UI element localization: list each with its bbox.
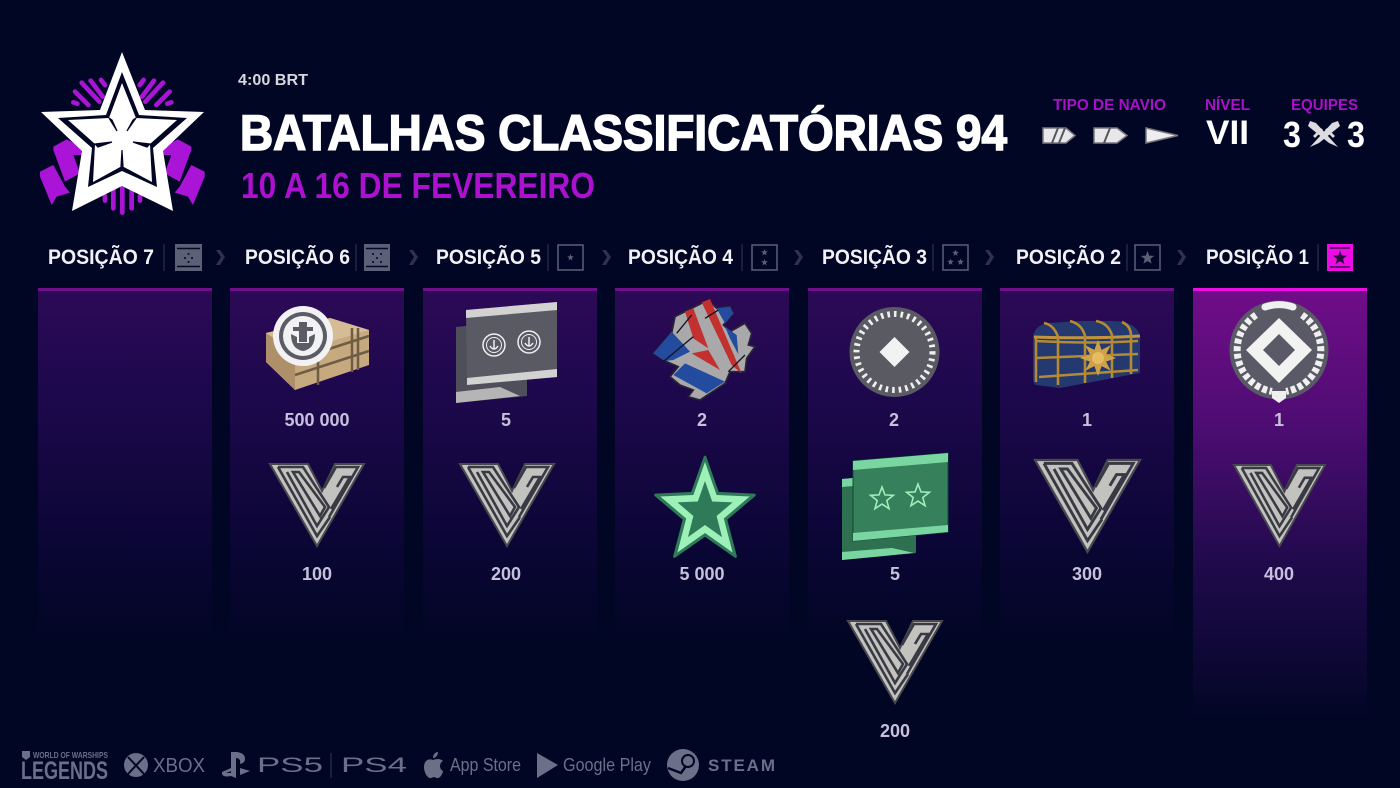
heading: position 4 — [628, 244, 777, 271]
reward amount: 5 000 — [679, 564, 725, 584]
heading: position 5: POSIÇÃO 5 — [436, 244, 541, 269]
icon: green signal flags — [842, 453, 948, 560]
icon: credits crate — [266, 306, 369, 390]
heading: position 3: POSIÇÃO 3 — [822, 244, 927, 269]
teams block: EQUIPES — [1291, 97, 1358, 114]
panel: position 3 — [808, 244, 982, 741]
heading: position 7: POSIÇÃO 7 — [48, 244, 154, 269]
logo: App Store: App Store — [450, 755, 521, 775]
reward amount: 100 — [302, 564, 332, 584]
icon: V emblem — [270, 464, 364, 546]
icon: wreath emblem — [1230, 300, 1328, 403]
panel: position 5 — [423, 244, 597, 640]
logo: PS5: PS5 — [257, 754, 323, 777]
panel: position 2 — [1000, 244, 1174, 640]
reward amount: 1 — [1082, 410, 1092, 430]
icon: V emblem — [848, 621, 942, 703]
icon: cruiser ship class — [1094, 128, 1127, 143]
panel: position 7 — [38, 244, 212, 640]
logo: Steam: STEAM — [708, 756, 775, 775]
arrow — [1177, 250, 1186, 265]
icon: signal flags — [456, 302, 557, 403]
logo: App Store — [424, 752, 521, 778]
tier block: VII — [1206, 114, 1249, 152]
panel: position 1 — [1193, 244, 1367, 720]
heading: position 2: POSIÇÃO 2 — [1016, 244, 1121, 269]
icon: dial token — [850, 307, 940, 397]
teams block: 3 — [1283, 114, 1301, 155]
reward amount: 1 — [1274, 410, 1284, 430]
title: BATALHAS CLASSIFICATÓRIAS 94 — [240, 105, 1007, 161]
reward amount: 2 — [889, 410, 899, 430]
arrow — [794, 250, 803, 265]
heading: position 4: POSIÇÃO 4 — [628, 244, 733, 269]
icon: crossed swords — [1308, 121, 1340, 147]
reward amount: 5 — [890, 564, 900, 584]
ship type block — [1043, 97, 1178, 143]
reward amount: 200 — [880, 721, 910, 741]
panel: position 4 — [615, 244, 789, 640]
logo: Xbox — [124, 753, 205, 777]
icon: destroyer ship class — [1043, 128, 1075, 143]
reward amount: 5 — [501, 410, 511, 430]
reward amount: 400 — [1264, 564, 1294, 584]
logo: World of Warships Legends — [21, 750, 108, 785]
heading: position 6: POSIÇÃO 6 — [245, 244, 350, 269]
logo: Xbox: XBOX — [153, 755, 205, 777]
icon: green star — [656, 457, 754, 556]
reward amount: 500 000 — [284, 410, 350, 430]
tier block: NÍVEL — [1205, 95, 1250, 114]
logo: Steam — [667, 749, 775, 781]
arrow — [985, 250, 994, 265]
icon: battleship ship class — [1146, 128, 1178, 143]
teams block — [1283, 97, 1365, 155]
logo: Google Play — [537, 753, 651, 778]
logo: star emblem — [40, 52, 205, 213]
logo: World of Warships Legends: WORLD OF WARSHIPS — [33, 750, 108, 760]
heading: position 1: POSIÇÃO 1 — [1206, 244, 1309, 269]
icon: treasure chest — [1033, 321, 1140, 388]
logo: World of Warships Legends: LEGENDS — [21, 757, 108, 785]
arrow — [602, 250, 611, 265]
icon: V emblem — [460, 464, 554, 546]
logo: PS4: PS4 — [341, 754, 408, 777]
tier block — [1205, 95, 1250, 152]
arrow — [409, 250, 418, 265]
ship type block: TIPO DE NAVIO — [1053, 97, 1166, 114]
icon: camouflage patch — [653, 299, 755, 400]
reward amount: 300 — [1072, 564, 1102, 584]
date subtitle: 10 A 16 DE FEVEREIRO — [241, 165, 595, 206]
icon: V emblem — [1035, 460, 1140, 552]
time label: 4:00 BRT — [238, 72, 308, 89]
icon: V emblem — [1234, 465, 1325, 546]
logo: PS5 — [222, 752, 323, 778]
panel: position 6 — [230, 244, 404, 640]
reward amount: 200 — [491, 564, 521, 584]
heading: position 7 — [48, 244, 202, 271]
footer: platform logos — [21, 749, 775, 785]
logo: Google Play: Google Play — [563, 755, 651, 775]
arrow — [216, 250, 225, 265]
reward amount: 2 — [697, 410, 707, 430]
teams block: 3 — [1347, 114, 1365, 155]
